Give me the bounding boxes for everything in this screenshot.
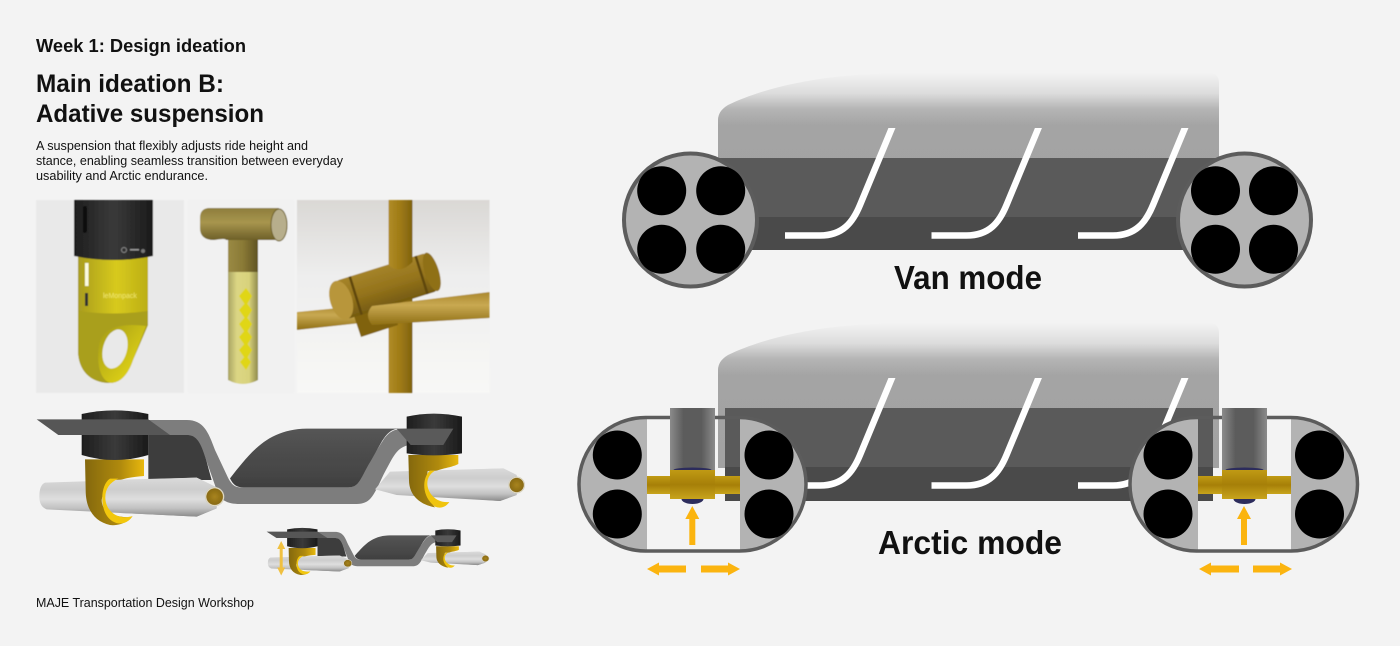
- photo: yellow battery pack: leMonpack: [103, 293, 137, 300]
- photo: yellow battery pack: [36, 200, 184, 393]
- large suspension assembly render: [37, 410, 525, 525]
- text block: description: usability and Arctic endurance.: [36, 168, 208, 183]
- photo: brass rod clamp: [297, 200, 490, 393]
- title: main ideation: [36, 70, 264, 128]
- arctic suspension lines: [785, 373, 1187, 486]
- diagram: arctic mode: [579, 323, 1358, 576]
- arrows: right unit: [1199, 506, 1292, 576]
- left adaptive wheel unit: [579, 408, 806, 551]
- van body: [718, 73, 1219, 250]
- van suspension lines: [785, 123, 1187, 236]
- arctic body: [718, 323, 1219, 501]
- text block: description: A suspension that flexibly adjusts ride height and: [36, 138, 308, 153]
- label: van mode: Van mode: [894, 259, 1042, 296]
- left wheel, van mode: [624, 154, 757, 286]
- heading: week label: Week 1: Design ideation: [36, 36, 246, 56]
- diagram: van mode: [624, 73, 1311, 286]
- title: main ideation: Main ideation B:: [36, 70, 224, 98]
- label: arctic mode: Arctic mode: [878, 524, 1062, 561]
- text block: description: [36, 138, 343, 183]
- photo: gold T-shaped handle: [188, 200, 294, 393]
- icon: vertical double arrow: [277, 541, 285, 576]
- small suspension assembly render: [267, 528, 489, 575]
- footer credit: MAJE Transportation Design Workshop: [36, 595, 254, 610]
- right wheel, van mode: [1178, 154, 1311, 286]
- text block: description: stance, enabling seamless transition between everyday: [36, 153, 343, 168]
- title: main ideation: Adative suspension: [36, 100, 264, 128]
- right adaptive wheel unit: [1130, 408, 1358, 551]
- arrows: left unit: [647, 506, 740, 576]
